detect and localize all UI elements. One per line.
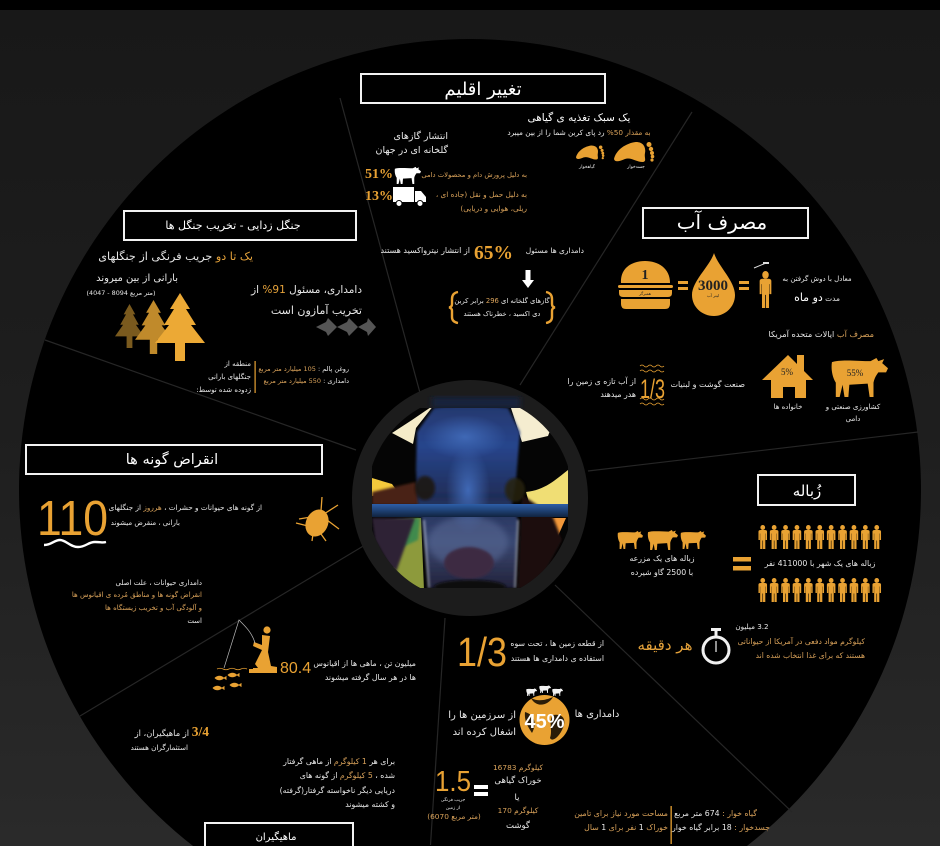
- stat: 13% transport: ریلی، هوایی و دریایی): [460, 204, 527, 213]
- panel: deforestation: [87, 211, 376, 394]
- wave underline: [44, 540, 106, 547]
- area needed text: جسدخوار : 18 برابر گیاه خوار: [671, 823, 770, 832]
- food yield text: یا: [515, 793, 520, 803]
- top strip: [0, 0, 940, 10]
- icon: drop 3000: 3000: [698, 278, 728, 294]
- icon: footprints: گیاهخوار: [578, 163, 596, 170]
- stat: 1/3 fresh water: [568, 365, 745, 405]
- icon: cow 55%: کشاورزی صنعتی و: [825, 403, 881, 411]
- bycatch text: شده ، 5 کیلوگرم از گونه های: [300, 771, 395, 780]
- panel: water use: [568, 208, 888, 423]
- species loss text: از گونه های حیوانات و حشرات ، هرروز از جنگلهای: [109, 503, 262, 512]
- center cow portrait: [352, 380, 588, 616]
- cleared rainforest breakdown: منطقه از: [224, 360, 251, 368]
- stat: 65% nitrous oxide: از انتشار نیترواکسید هستند: [380, 246, 470, 255]
- bycatch text: دریایی دیگر ناخواسته گرفتار(گرفته): [280, 786, 396, 795]
- water heading: [643, 208, 808, 238]
- icon: footprints: [576, 142, 654, 170]
- farm text: [629, 554, 695, 577]
- icon: drop 3000: لیتر آب: [707, 293, 719, 298]
- stat: 13% transport: 13%: [365, 189, 393, 204]
- deforestation heading: جنگل زدایی - تخریب جنگل ها: [165, 219, 301, 232]
- land text: استفاده ی دامداری ها هستند: [511, 654, 604, 663]
- ocean fish text: ها در هر سال گرفته میشوند: [325, 673, 416, 682]
- cleared rainforest breakdown: زدوده شده توسط:: [196, 386, 251, 394]
- fishing heading: [205, 823, 353, 846]
- food yield text: کیلوگرم 170: [498, 806, 539, 815]
- area needed text: [574, 806, 770, 844]
- icon: globe 45%: [520, 685, 570, 745]
- cleared rainforest breakdown: جنگلهای بارانی: [208, 372, 251, 381]
- acre per second text: یک تا دو جریب فرنگی از جنگلهای: [98, 249, 253, 264]
- land text: از قطعه زمین ها ، تحت سوه: [510, 639, 604, 648]
- icon: truck: [393, 187, 426, 206]
- area needed text: گیاه خوار : 674 متر مربع: [674, 809, 757, 818]
- fishing heading: ماهیگیران: [256, 831, 296, 843]
- icon: house 5%: [762, 355, 813, 411]
- plant diet footprint text: یک سبک تغذیه ی گیاهی: [528, 111, 631, 124]
- stat: 1/3 fresh water: صنعت گوشت و لبنیات: [670, 379, 745, 389]
- icon: house 5%: 5%: [781, 367, 794, 377]
- greenhouse gas heading: انتشار گازهای: [394, 130, 448, 142]
- land text: [510, 639, 604, 663]
- US water use heading: مصرف آب ایالات متحده آمریکا: [768, 329, 874, 339]
- main cause text: [72, 579, 202, 625]
- stat: 1/3 fresh water: 1/3: [640, 374, 665, 404]
- icon: burger: همبرگر: [638, 291, 651, 296]
- manure text: [735, 622, 865, 660]
- stat: 13% transport: به دلیل حمل و نقل (جاده ای ،: [436, 190, 527, 199]
- icon: trees: [115, 293, 205, 361]
- stat: 1.5 acres: (متر مربع 6070): [427, 812, 481, 821]
- icon: globe 45%: 45%: [524, 711, 565, 733]
- stat: 3/4: استثمارگران هستند: [131, 743, 188, 752]
- stat: 110: 110: [37, 492, 108, 546]
- main cause text: است: [187, 617, 202, 625]
- stat: 65% nitrous oxide: [380, 243, 584, 264]
- food yield text: خوراک گیاهی: [494, 775, 542, 786]
- stat: 1.5 acres: [427, 766, 481, 821]
- manure text: کیلوگرم مواد دفعی در آمریکا از حیواناتی: [737, 636, 865, 646]
- climate heading: [361, 74, 605, 103]
- stat: 1.5 acres: 1.5: [435, 766, 471, 798]
- species loss text: [109, 503, 262, 527]
- icon: drop 3000: [692, 253, 735, 316]
- shower text: مدت دو ماه: [794, 291, 840, 304]
- acre per second text: (متر مربع 8094 - 4047): [87, 289, 155, 297]
- icon: stopwatch: [703, 628, 729, 663]
- deforestation heading: [124, 211, 356, 240]
- farm text: با 2500 گاو شیرده: [631, 568, 693, 577]
- manure text: هستند که برای غذا انتخاب شده اند: [756, 651, 865, 660]
- equals sign: [739, 281, 749, 290]
- stat: 1.5 acres: از زمین: [446, 806, 460, 811]
- acre per second text: [87, 249, 253, 297]
- stat: 13% transport: [365, 187, 527, 213]
- city text: زباله های یک شهر با 411000 نفر: [764, 559, 876, 568]
- equals sign: [474, 785, 488, 796]
- every minute label: هر دقیقه: [638, 636, 693, 654]
- land occupied text: [448, 709, 619, 738]
- species loss text: بارانی ، منقرض میشوند: [111, 519, 180, 527]
- extinction heading: [26, 445, 322, 474]
- main cause text: و آلودگی آب و تخریب زیستگاه ها: [105, 603, 202, 612]
- stat: 3/4: [131, 724, 209, 752]
- area needed text: خوراک 1 نفر برای 1 سال: [584, 823, 668, 832]
- food yield text: گوشت: [506, 820, 531, 831]
- icon: cow 55%: 55%: [847, 368, 864, 378]
- land occupied text: دامداری ها: [575, 709, 619, 720]
- arrow down: [522, 270, 534, 288]
- stat: 51% livestock: 51%: [365, 167, 393, 182]
- bycatch text: برای هر 1 کیلوگرم از ماهی گرفتار: [282, 757, 395, 766]
- equals sign: [678, 281, 688, 290]
- braced note: دی اکسید ، خطرناک هستند: [464, 310, 540, 318]
- shower text: معادل با دوش گرفتن به: [782, 274, 852, 283]
- icon: burger: 1: [642, 268, 648, 283]
- icon: footprints: جسدخوار: [626, 165, 645, 170]
- icon: burger: [618, 261, 673, 309]
- amazon 91% text: تخریب آمازون است: [271, 303, 362, 317]
- stat: 1/3 fresh water: از آب تازه ی زمین را: [568, 376, 636, 386]
- amazon 91% text: دامداری، مسئول 91% از: [250, 284, 362, 296]
- main cause text: دامداری حیوانات ، علت اصلی: [115, 579, 202, 587]
- icon: bug: [296, 497, 339, 541]
- cleared rainforest breakdown: دامداری : 550 میلیارد متر مربع: [263, 377, 349, 385]
- cleared rainforest breakdown: روغن پالم : 105 میلیارد متر مربع: [258, 365, 349, 373]
- braced note: [449, 292, 555, 323]
- food yield text: [493, 763, 544, 831]
- farm text: زباله های یک مزرعه: [629, 554, 695, 563]
- icon: person showering: [754, 262, 771, 308]
- panel: climate change: [361, 74, 654, 323]
- icon: cow 55%: [825, 358, 888, 423]
- food yield text: کیلوگرم 16783: [493, 763, 544, 772]
- icon: gray arrows: [316, 318, 376, 336]
- icon: three cows: [618, 530, 706, 550]
- waste heading: [758, 475, 855, 505]
- stat: 1/3 land: 1/3: [457, 629, 507, 675]
- land occupied text: از سرزمین ها را: [448, 710, 516, 721]
- ocean fish text: [313, 659, 416, 682]
- icon: cow 55%: دامی: [846, 415, 860, 423]
- stat: 65% nitrous oxide: 65%: [474, 243, 513, 264]
- cleared rainforest breakdown: [196, 360, 349, 394]
- amazon 91% text: [250, 284, 362, 317]
- area needed text: مساحت مورد نیاز برای تامین: [574, 809, 668, 818]
- shower text: [782, 274, 852, 304]
- greenhouse gas heading: گلخانه ای در جهان: [375, 144, 448, 156]
- bycatch text: و کشته میشوند: [345, 800, 395, 809]
- stat: 1.5 acres: جریب فرنگی: [441, 796, 465, 803]
- stat: 51% livestock: [365, 167, 527, 184]
- ocean fish text: میلیون تن ، ماهی ها از اقیانوس: [313, 659, 416, 668]
- climate heading: تغییر اقلیم: [444, 79, 522, 100]
- main cause text: انقراض گونه ها و مناطق مُرده ی اقیانوس ها: [72, 590, 202, 599]
- land occupied text: اشغال کرده اند: [453, 727, 516, 738]
- water heading: مصرف آب: [677, 209, 767, 234]
- plant diet footprint text: [507, 111, 651, 137]
- equals sign: [733, 557, 751, 570]
- waste heading: زُباله: [793, 482, 821, 500]
- greenhouse gas heading: [375, 130, 448, 156]
- panel: fishing: [131, 620, 416, 846]
- stat: 1/3 fresh water: هدر میدهند: [600, 390, 636, 399]
- braced note: گازهای گلخانه ای 296 برابر کربن: [454, 296, 550, 305]
- plant diet footprint text: به مقدار 50% رد پای کربن شما را از بین میبرد: [507, 128, 651, 137]
- stat: 65% nitrous oxide: دامداری ها مسئول: [526, 246, 584, 255]
- icon: fisherman: [212, 620, 277, 690]
- manure text: 3.2 میلیون: [735, 622, 769, 631]
- panel: land use: [427, 629, 770, 844]
- bycatch text: [280, 757, 396, 809]
- people rows: [758, 525, 881, 602]
- panel: species extinction: [26, 445, 339, 625]
- extinction heading: انقراض گونه ها: [126, 451, 218, 468]
- stat: 51% livestock: به دلیل پرورش دام و محصولات دامی: [421, 171, 527, 179]
- stat: 3/4: 3/4 از ماهیگیران، از: [134, 724, 209, 739]
- icon: house 5%: خانواده ها: [774, 403, 802, 411]
- acre per second text: بارانی از بین میروند: [96, 273, 178, 284]
- panel: waste: [618, 475, 881, 663]
- stat: 80.4: 80.4: [280, 660, 311, 677]
